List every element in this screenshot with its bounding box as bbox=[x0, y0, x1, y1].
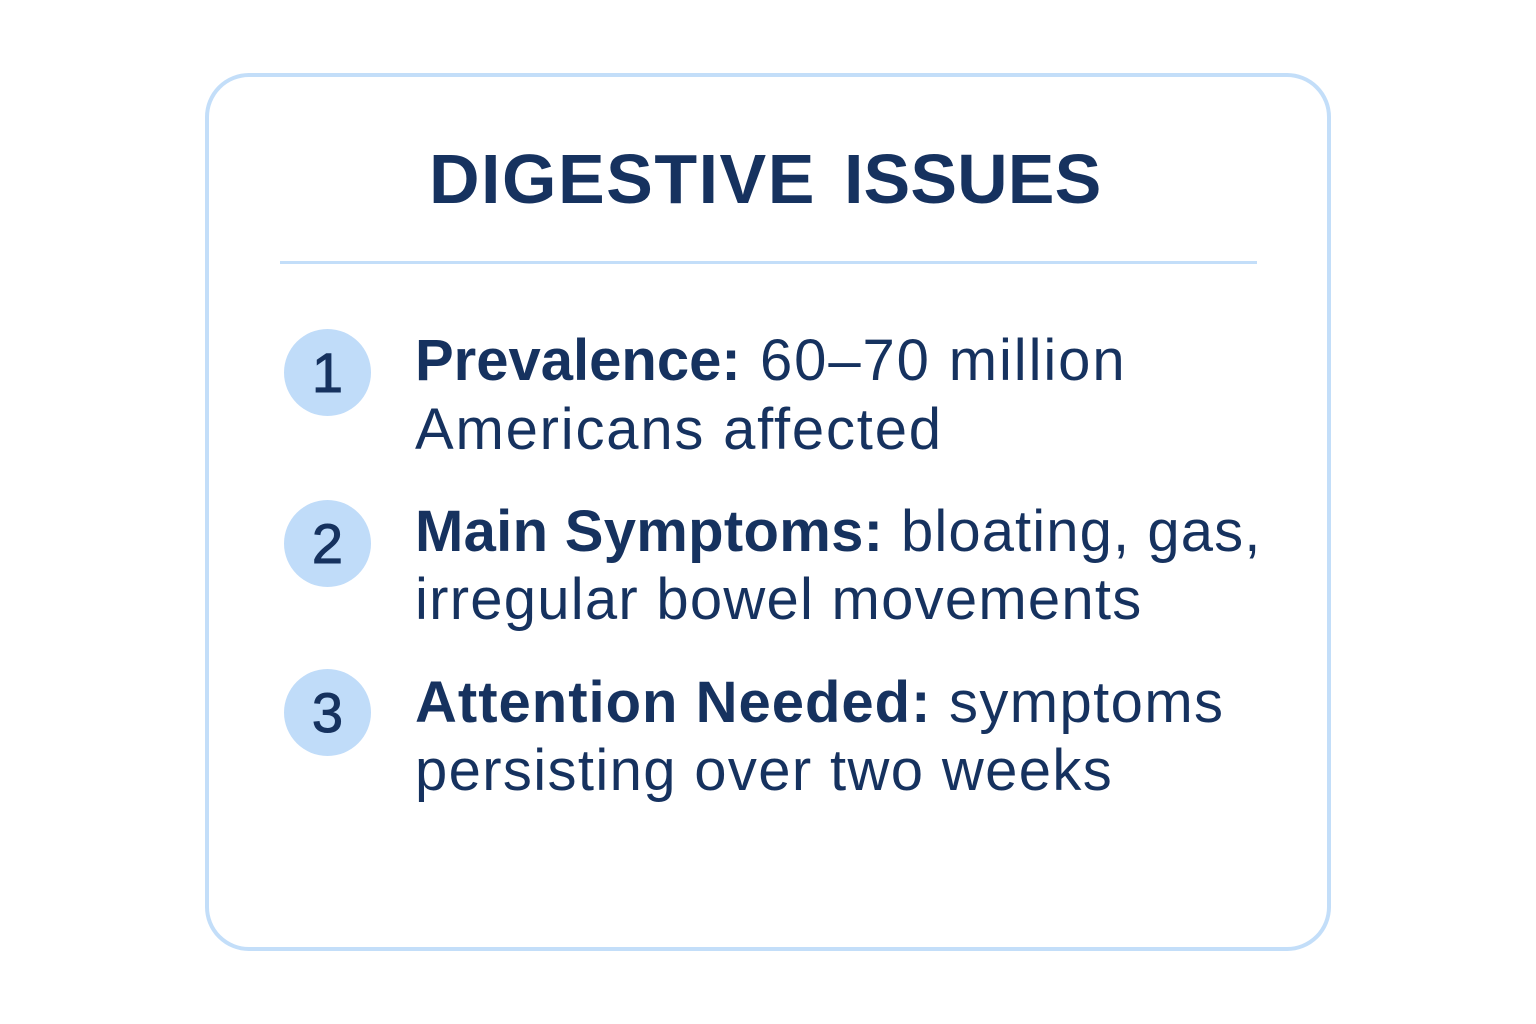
number badge 3: 3 bbox=[312, 681, 343, 744]
number badge 3 bbox=[284, 669, 371, 756]
number badge 2: 2 bbox=[312, 512, 343, 575]
text: attention needed: persisting over two weeks bbox=[415, 738, 1113, 803]
title: ISSUES bbox=[844, 140, 1101, 218]
number badge 1: 1 bbox=[312, 341, 343, 404]
text: prevalence bbox=[415, 328, 1126, 462]
number badge 2 bbox=[284, 500, 371, 587]
text: prevalence: Americans affected bbox=[415, 397, 943, 462]
text: main symptoms bbox=[415, 499, 1261, 632]
text: main symptoms: bloating, gas, bbox=[901, 499, 1261, 564]
text: main symptoms: Main Symptoms: bbox=[415, 499, 883, 564]
text: attention needed bbox=[415, 670, 1224, 803]
text: prevalence: 60–70 million bbox=[760, 328, 1126, 393]
text: attention needed: symptoms bbox=[949, 670, 1224, 735]
text: prevalence: Prevalence: bbox=[415, 328, 741, 393]
text: attention needed: Attention Needed: bbox=[415, 670, 931, 735]
panel: digestive issues card bbox=[205, 73, 1331, 951]
title bbox=[429, 140, 1101, 218]
text: main symptoms: irregular bowel movements bbox=[415, 567, 1143, 632]
number badge 1 bbox=[284, 329, 371, 416]
title: DIGESTIVE bbox=[429, 140, 816, 218]
